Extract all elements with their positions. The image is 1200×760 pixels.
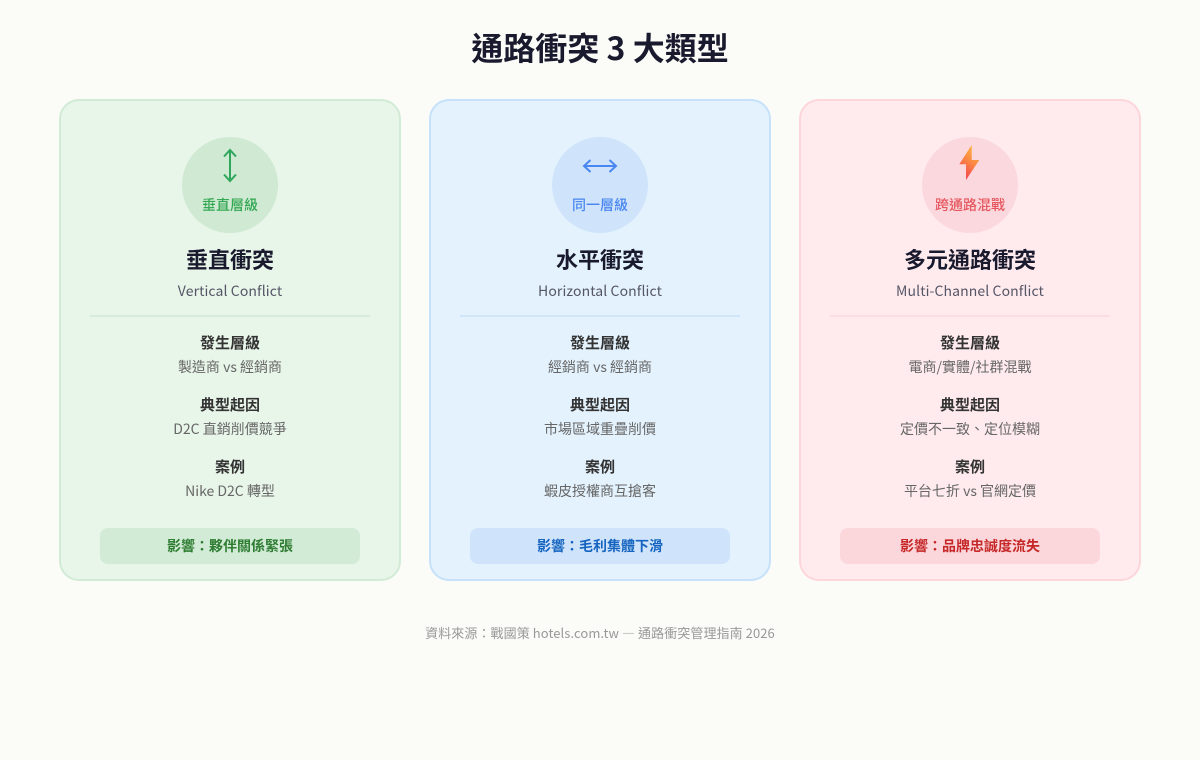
text: cause: 定價不一致、定位模糊 — [900, 419, 1040, 439]
text: case: 平台七折 vs 官網定價 — [904, 481, 1036, 501]
label: cause: 典型起因 — [200, 394, 260, 415]
impact callout — [100, 528, 360, 564]
impact callout — [470, 528, 730, 564]
text: case: 蝦皮授權商互搶客 — [544, 481, 656, 501]
icon: left-right arrow — [582, 159, 618, 173]
text: cause: D2C 直銷削價競爭 — [173, 419, 287, 439]
subtitle: Vertical Conflict — [178, 281, 282, 301]
label: cause: 典型起因 — [570, 394, 630, 415]
icon: up-down arrow — [223, 148, 237, 182]
label: level: 發生層級 — [200, 332, 260, 353]
impact callout: 影響：品牌忠誠度流失 — [900, 536, 1040, 556]
label: level: 發生層級 — [570, 332, 630, 353]
badge label: 跨通路混戰 — [935, 195, 1005, 215]
label: case: 案例 — [215, 456, 245, 477]
panel: vertical conflict — [59, 99, 401, 581]
subtitle: Horizontal Conflict — [538, 281, 662, 301]
label: case: 案例 — [955, 456, 985, 477]
label: cause: 典型起因 — [940, 394, 1000, 415]
text: case: Nike D2C 轉型 — [185, 481, 275, 501]
panel: horizontal conflict — [429, 99, 771, 581]
panel: multi-channel conflict — [799, 99, 1141, 581]
impact callout: 影響：毛利集體下滑 — [537, 536, 663, 556]
icon: lightning badge — [922, 137, 1018, 233]
icon: lightning bolt — [959, 145, 980, 180]
impact callout: 影響：夥伴關係緊張 — [167, 536, 293, 556]
title: 通路衝突 3 大類型 — [471, 24, 729, 70]
text: level: 製造商 vs 經銷商 — [178, 357, 282, 377]
heading: 垂直衝突 — [186, 243, 274, 275]
badge label: 同一層級 — [572, 195, 628, 215]
label: case: 案例 — [585, 456, 615, 477]
heading: 水平衝突 — [556, 243, 644, 275]
subtitle: Multi-Channel Conflict — [896, 281, 1044, 301]
text: cause: 市場區域重疊削價 — [544, 419, 656, 439]
icon: horizontal arrow badge — [552, 137, 648, 233]
label: level: 發生層級 — [940, 332, 1000, 353]
badge label: 垂直層級 — [202, 195, 258, 215]
text: level: 經銷商 vs 經銷商 — [548, 357, 652, 377]
text: level: 電商/實體/社群混戰 — [908, 357, 1031, 377]
impact callout — [840, 528, 1100, 564]
source footer: 資料來源：戰國策 hotels.com.tw — 通路衝突管理指南 2026 — [425, 623, 775, 642]
heading: 多元通路衝突 — [904, 243, 1036, 275]
icon: vertical arrow badge — [182, 137, 278, 233]
